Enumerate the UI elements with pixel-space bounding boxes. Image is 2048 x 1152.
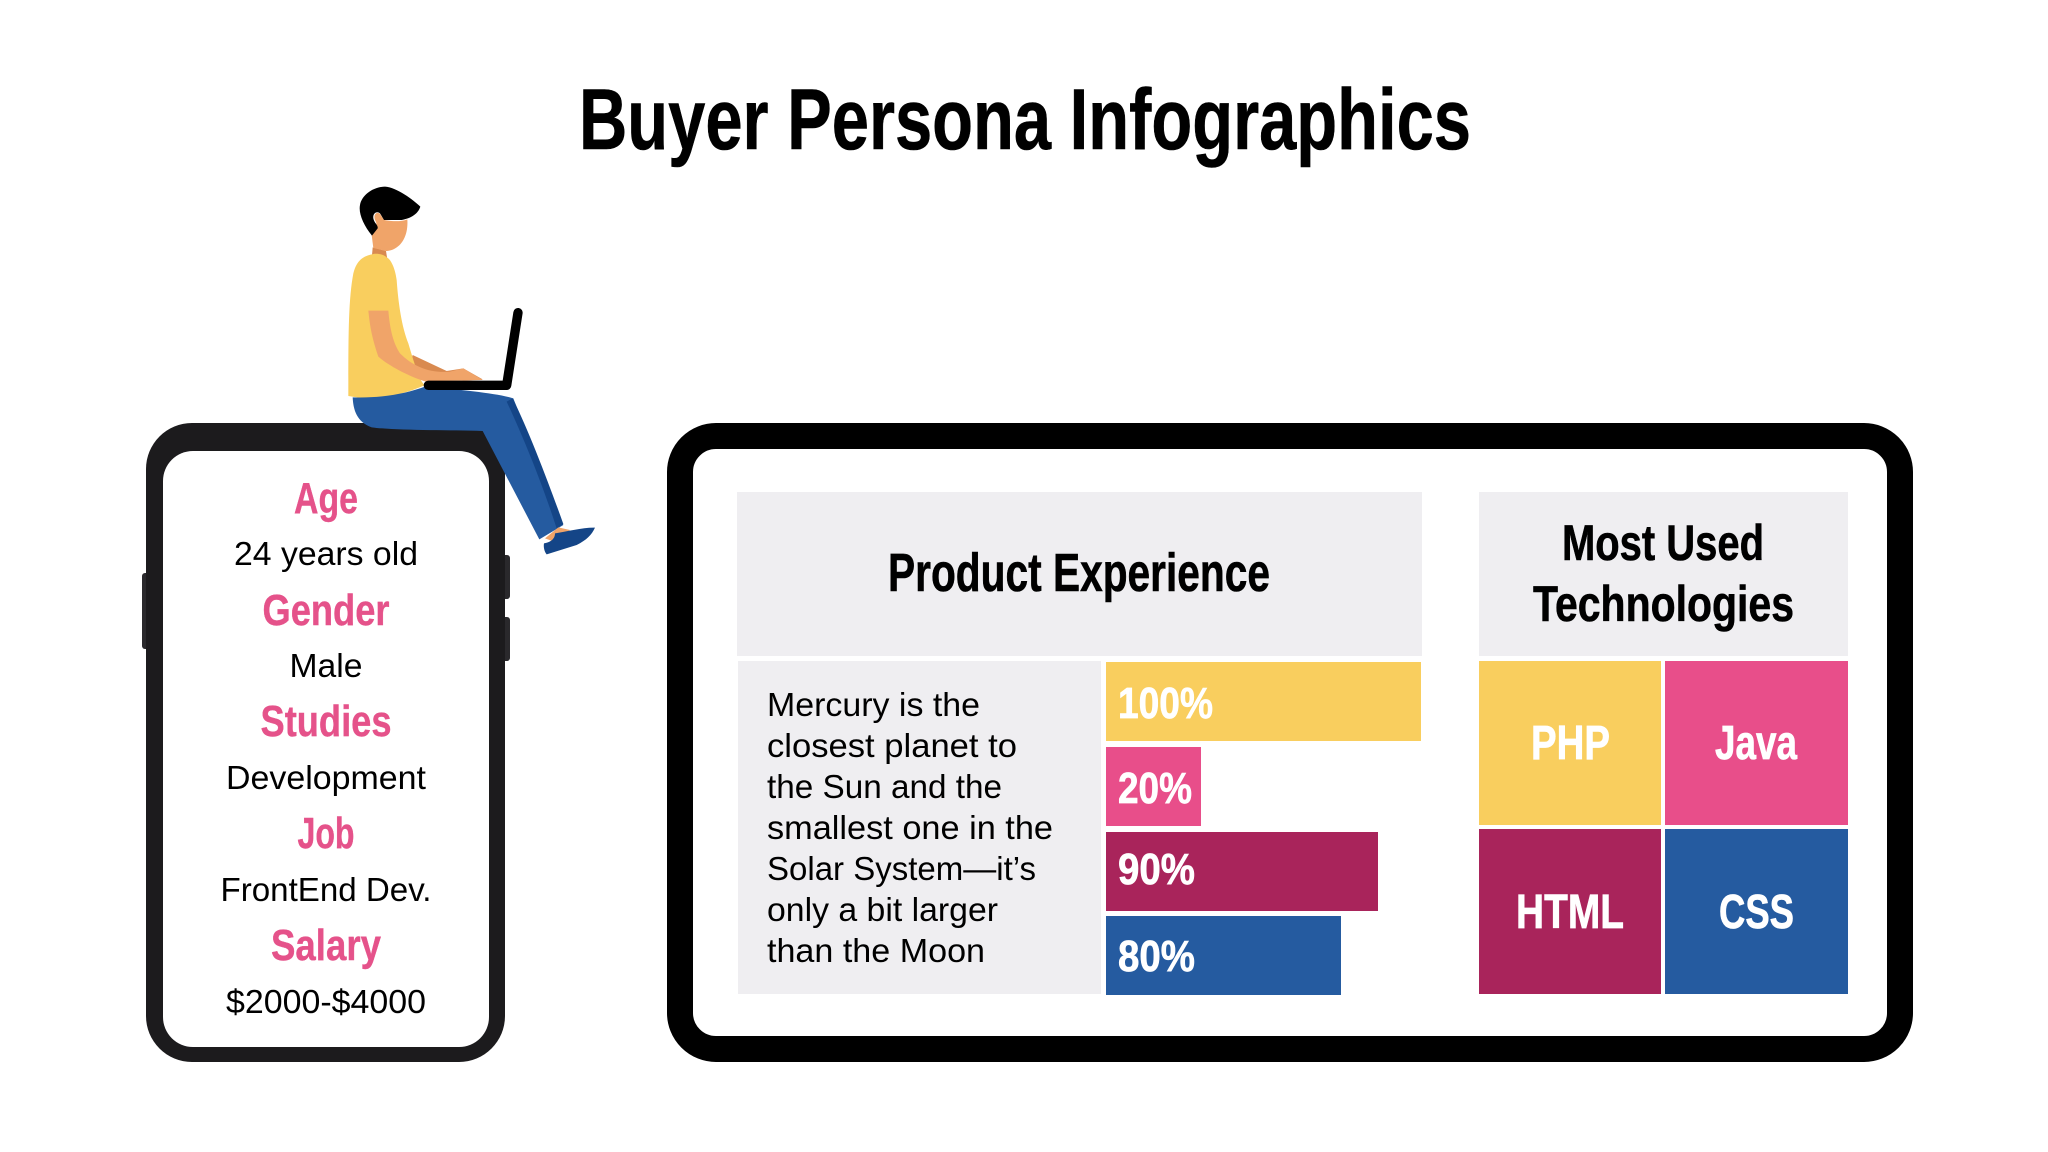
- persona field: gender: Male: [290, 647, 362, 684]
- section: product experience: [737, 492, 1422, 995]
- bar: 90%: 90%: [1118, 845, 1195, 894]
- persona field: age: [234, 474, 418, 572]
- text block: description: than the Moon: [767, 932, 985, 969]
- bar: 20%: [1106, 747, 1201, 826]
- bar: 80%: [1106, 916, 1341, 995]
- persona field: studies: Studies: [260, 697, 392, 746]
- persona field: job: [220, 809, 432, 908]
- tile: HTML: [1479, 829, 1661, 994]
- panel: phone persona card: [142, 423, 510, 1062]
- persona field: studies: [226, 697, 426, 796]
- persona field: salary: [226, 921, 426, 1020]
- tile: PHP: [1479, 661, 1661, 825]
- persona field: gender: Gender: [262, 586, 390, 635]
- phone body: [146, 423, 505, 1062]
- bar: 90%: [1106, 832, 1378, 911]
- persona field: job: FrontEnd Dev.: [220, 871, 432, 908]
- text block: description: [738, 661, 1101, 994]
- tile: PHP: PHP: [1531, 717, 1610, 770]
- heading: product experience: [737, 492, 1422, 656]
- bar: 20%: 20%: [1118, 764, 1192, 813]
- tile: CSS: CSS: [1719, 886, 1794, 939]
- persona field: gender: [262, 586, 390, 684]
- tile: HTML: HTML: [1516, 886, 1624, 939]
- persona field: age: 24 years old: [234, 535, 418, 572]
- persona field: age: Age: [294, 474, 358, 523]
- persona field: salary: Salary: [271, 921, 381, 970]
- text block: description: the Sun and the: [767, 768, 1002, 805]
- tile: Java: [1665, 661, 1848, 825]
- panel: tablet frame: [680, 436, 1900, 1049]
- text block: description: closest planet to: [767, 727, 1017, 764]
- bar: 80%: 80%: [1118, 932, 1195, 981]
- phone screen: [163, 451, 489, 1047]
- heading: most used technologies: [1479, 492, 1848, 656]
- bar chart: [1106, 662, 1421, 995]
- section: most used technologies: [1479, 492, 1848, 994]
- bar: 100%: 100%: [1118, 679, 1213, 728]
- text block: description: smallest one in the: [767, 809, 1053, 846]
- illustration: man sitting on phone with laptop: [348, 187, 595, 554]
- text block: description: Mercury is the: [767, 686, 980, 723]
- title: Buyer Persona Infographics: [579, 72, 1471, 168]
- tile: CSS: [1665, 829, 1848, 994]
- heading: product experience: Product Experience: [888, 543, 1270, 603]
- bar: 100%: [1106, 662, 1421, 741]
- persona field: job: Job: [298, 809, 354, 858]
- persona field: salary: $2000-$4000: [226, 983, 426, 1020]
- tile: Java: Java: [1715, 717, 1797, 770]
- text block: description: Solar System—it’s: [767, 850, 1036, 887]
- text block: description: only a bit larger: [767, 891, 998, 928]
- heading: most used technologies: Most Used: [1562, 515, 1764, 571]
- tablet body: [680, 436, 1900, 1049]
- persona field: studies: Development: [226, 759, 426, 796]
- heading: most used technologies: Technologies: [1533, 576, 1794, 632]
- phone side buttons: [142, 555, 510, 661]
